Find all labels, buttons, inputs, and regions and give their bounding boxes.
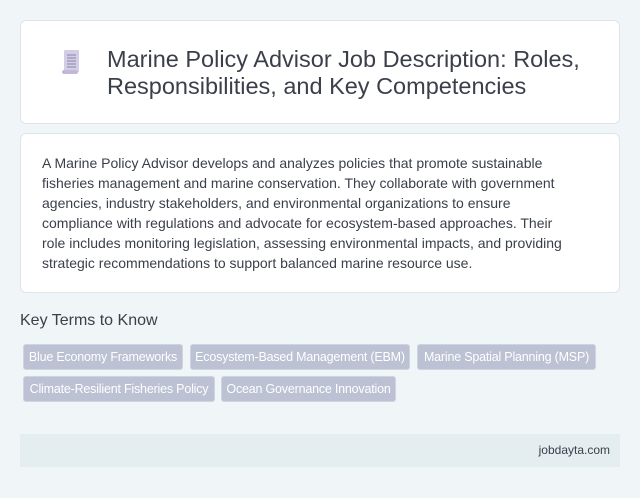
tag 2 bbox=[190, 344, 410, 370]
footer text: jobdayta.com bbox=[539, 443, 610, 457]
header card bbox=[20, 20, 620, 124]
tag 4: Climate-Resilient Fisheries Policy bbox=[30, 382, 208, 396]
tag 3 bbox=[417, 344, 596, 370]
description card bbox=[20, 133, 620, 293]
tag 5: Ocean Governance Innovation bbox=[226, 382, 391, 396]
description text: A Marine Policy Advisor develops and analyzes policies that promote sustainable fisheries management and marine conservation. They collaborate with government agencies, industry stakeholders, and environmental organizations to ensure compliance with regulations and advocate for ecosystem-based approaches. Their role includes monitoring legislation, assessing environmental impacts, and providing strategic recommendations to support balanced marine resource use. bbox=[42, 155, 562, 271]
tag 1: Blue Economy Frameworks bbox=[29, 350, 177, 364]
heading: key terms: Key Terms to Know bbox=[20, 312, 158, 329]
tag 1 bbox=[23, 344, 183, 370]
icon: document bbox=[62, 50, 79, 74]
footer bbox=[20, 434, 620, 467]
title: Marine Policy Advisor Job Description: Roles, Responsibilities, and Key Competencies bbox=[107, 46, 580, 99]
tag 2: Ecosystem-Based Management (EBM) bbox=[195, 350, 405, 364]
tag 4 bbox=[23, 376, 215, 402]
tag 3: Marine Spatial Planning (MSP) bbox=[424, 350, 589, 364]
tag 5 bbox=[221, 376, 396, 402]
